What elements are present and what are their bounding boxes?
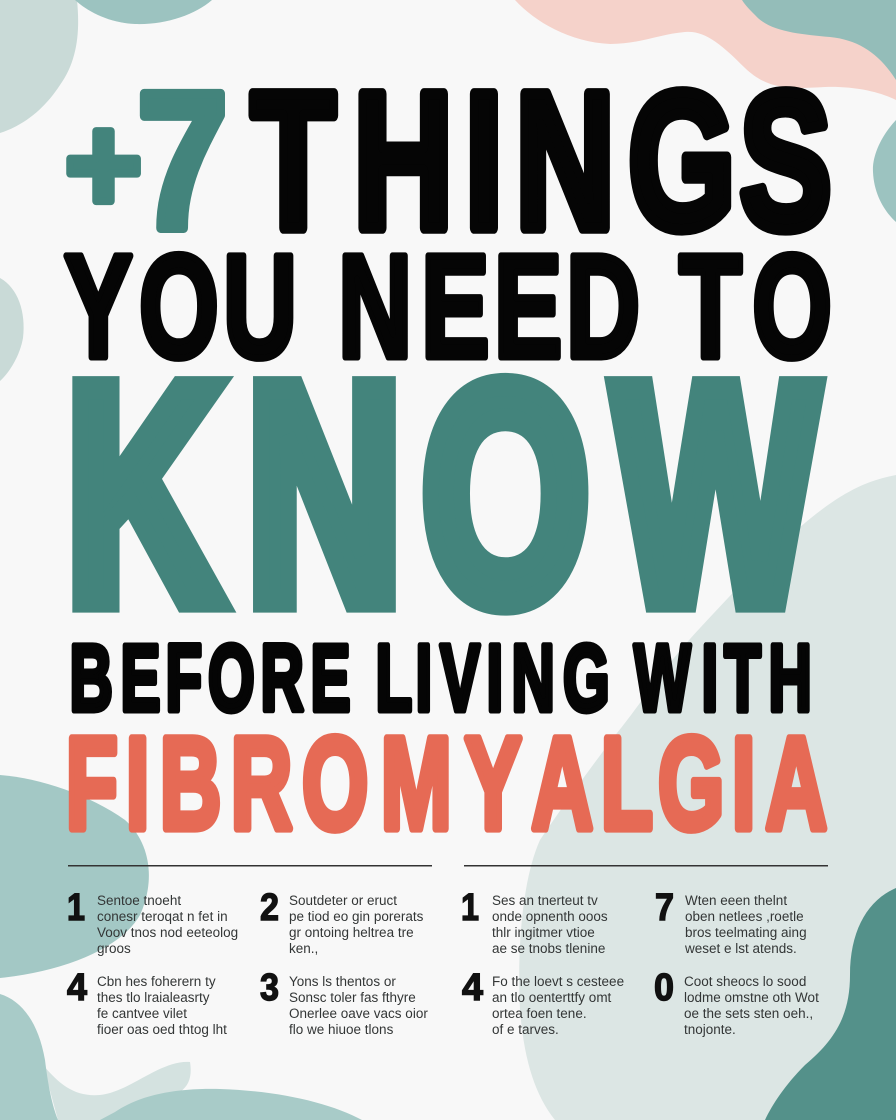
item 4 right: 4 [462, 967, 483, 1009]
item 4 left: fe cantvee vilet [97, 1006, 187, 1021]
item 4 right: Fo the loevt s cesteee [492, 974, 624, 989]
left column rule [68, 865, 432, 866]
title: BEFORE LIVING WITH: BEFORE LIVING WITH [70, 625, 812, 731]
item 1 left: Voov tnos nod eeteolog [97, 925, 238, 940]
item 3 left [260, 967, 428, 1037]
item 1 right: ae se tnobs tlenine [492, 941, 605, 956]
title: 7: 7 [137, 52, 228, 270]
item 0 right: Coot sheocs lo sood [684, 974, 806, 989]
title [64, 52, 832, 857]
item 7 right: 7 [655, 887, 674, 929]
item 4 right: of e tarves. [492, 1022, 559, 1037]
item 2 left: 2 [260, 887, 279, 929]
item 4 left [67, 967, 227, 1037]
item 0 right: 0 [654, 967, 674, 1009]
item 3 left: 3 [260, 967, 279, 1009]
item 4 left: thes tlo lraialeasrty [97, 990, 210, 1005]
item 4 right: an tlo oenterttfy omt [492, 990, 612, 1005]
item 2 left: gr ontoing heltrea tre [289, 925, 414, 940]
item 3 left: Sonsc toler fas fthyre [289, 990, 416, 1005]
item 1 right: Ses an tnerteut tv [492, 893, 598, 908]
item 4 right: ortea foen tene. [492, 1006, 587, 1021]
item 7 right [655, 887, 807, 956]
item 1 right: 1 [461, 887, 479, 929]
item 1 left: conesr teroqat n fet in [97, 909, 228, 924]
item 1 left: 1 [67, 887, 85, 929]
item 1 left: Sentoe tnoeht [97, 893, 181, 908]
item 1 right [461, 887, 608, 956]
item 4 right [462, 967, 624, 1037]
title: plus sign: + [64, 88, 142, 242]
item 1 right: thlr ingitmer vtioe [492, 925, 595, 940]
item 0 right: oe the sets sten oeh., [684, 1006, 813, 1021]
title: YOU NEED TO: YOU NEED TO [64, 224, 832, 388]
item 0 right [654, 967, 819, 1037]
item 1 left [67, 887, 238, 956]
item 4 left: Cbn hes foherern ty [97, 974, 216, 989]
item 3 left: Yons ls thentos or [289, 974, 396, 989]
item 4 left: fioer oas oed thtog lht [97, 1022, 227, 1037]
item 7 right: weset e lst atends. [684, 941, 797, 956]
title: FIBROMYALGIA: FIBROMYALGIA [66, 711, 827, 857]
item 3 left: Onerlee oave vacs oior [289, 1006, 428, 1021]
item 3 left: flo we hiuoe tlons [289, 1022, 394, 1037]
item 2 left: Soutdeter or eruct [289, 893, 397, 908]
item 7 right: bros teelmating aing [685, 925, 807, 940]
item 1 left: groos [97, 941, 131, 956]
title: KNOW: KNOW [66, 320, 819, 667]
title: THINGS: THINGS [251, 52, 832, 270]
item 1 right: onde opnenth ooos [492, 909, 608, 924]
item 2 left: pe tiod eo gin porerats [289, 909, 424, 924]
item 4 left: 4 [67, 967, 87, 1009]
item 0 right: tnojonte. [684, 1022, 736, 1037]
item 2 left: ken., [289, 941, 318, 956]
item 0 right: lodme omstne oth Wot [684, 990, 819, 1005]
right column rule [464, 865, 828, 866]
item 7 right: Wten eeen thelnt [685, 893, 787, 908]
item 2 left [260, 887, 424, 956]
item 7 right: oben netlees ,roetle [685, 909, 804, 924]
